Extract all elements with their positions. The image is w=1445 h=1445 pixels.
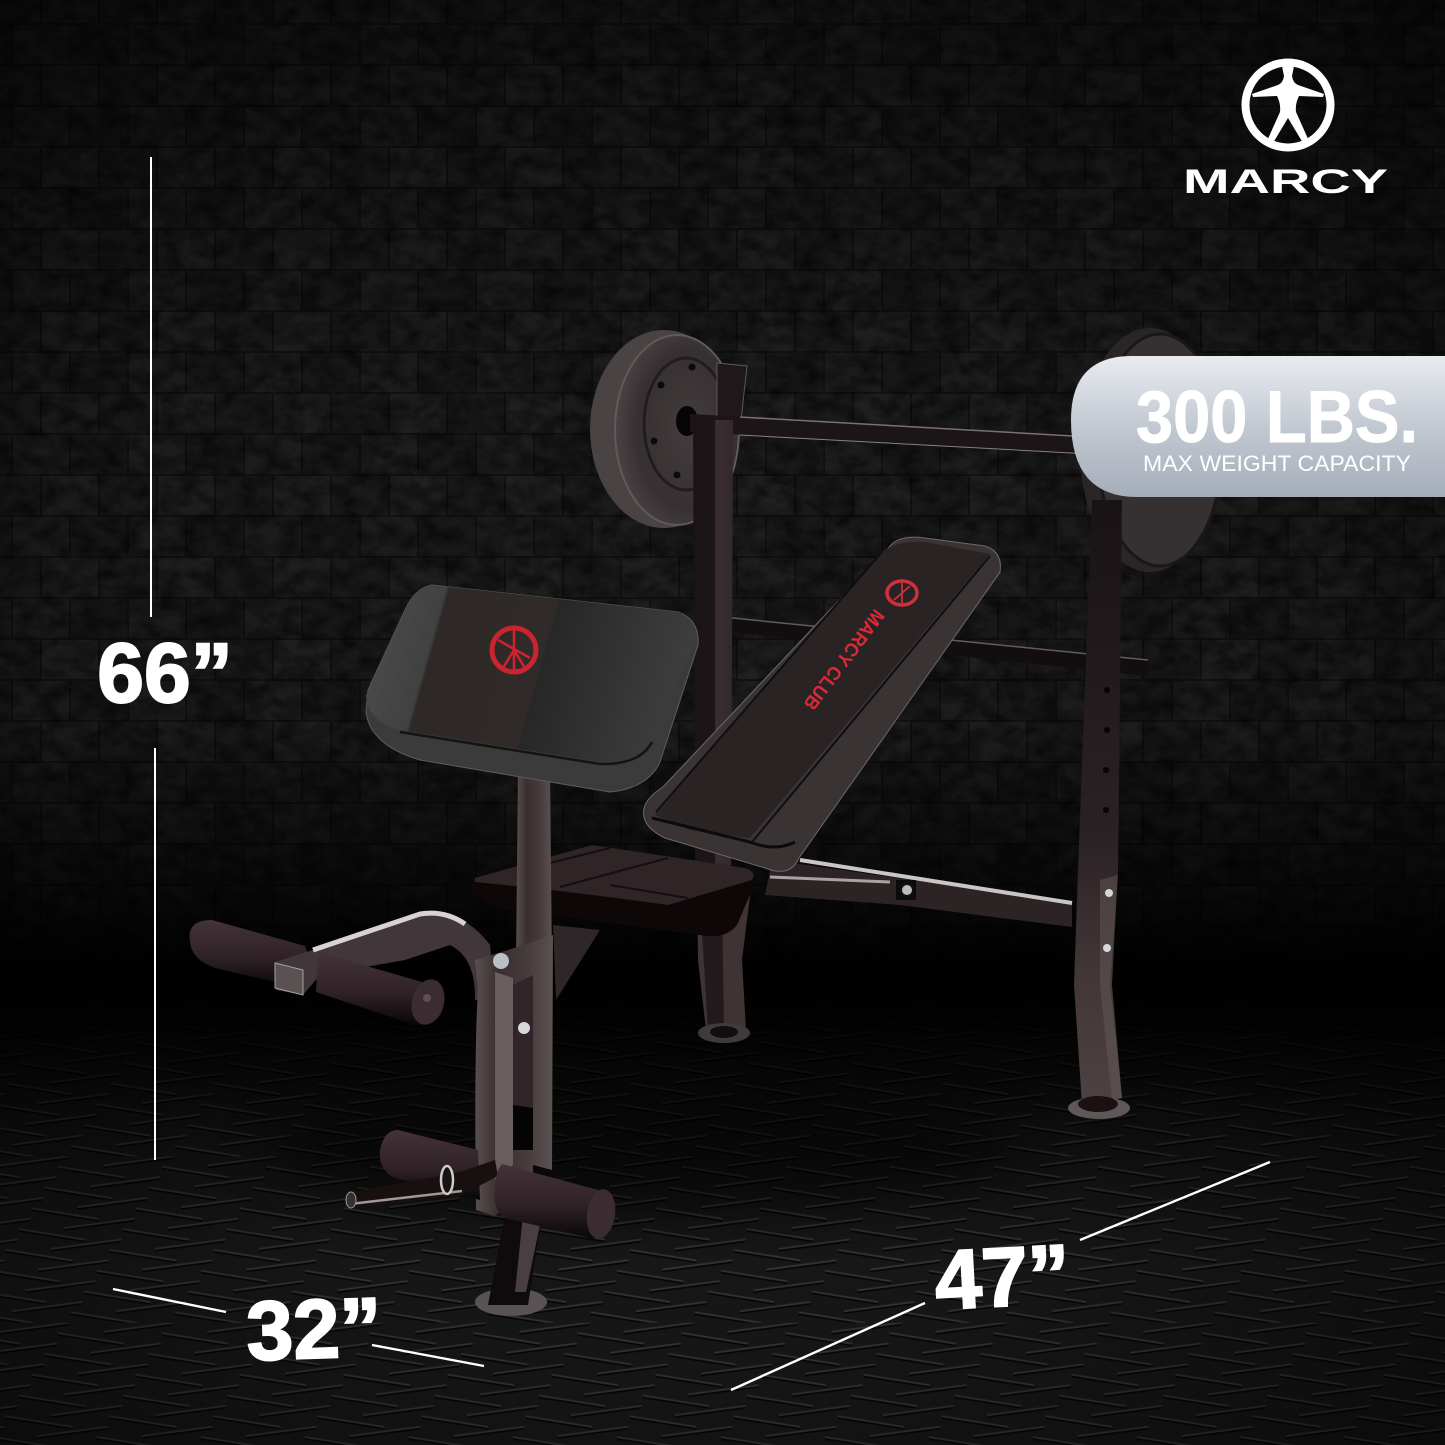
front support post (475, 925, 600, 1216)
floor shadow beneath bench (260, 1090, 1020, 1210)
dimension: depth 32 inches: 32” (245, 1280, 383, 1378)
weight bench (189, 328, 1222, 1316)
left upright (693, 420, 752, 1043)
icon: vitruvian man in circle (1246, 62, 1330, 148)
background: brick wall (0, 0, 1445, 1000)
callout: max weight capacity: 300 LBS. (1136, 377, 1418, 458)
preacher curl post (516, 770, 552, 965)
background: diamond plate floor (0, 985, 1445, 1445)
lower foot and base (475, 1215, 547, 1316)
dimension: depth 32 inches (113, 1280, 484, 1378)
barbell and rear cross bars (690, 414, 1148, 676)
leg developer arm and rollers (189, 912, 495, 1028)
incline back pad (644, 537, 1000, 871)
incline back pad: MARCY CLUB (799, 605, 888, 713)
bench brace (765, 860, 1072, 927)
wordmark: MARCY (1183, 163, 1389, 201)
left weight plate (590, 330, 747, 528)
dimension: height 66 inches (97, 157, 233, 1160)
preacher curl pad (366, 585, 698, 792)
dimension: width 47 inches (731, 1162, 1270, 1390)
callout: max weight capacity: MAX WEIGHT CAPACITY (1143, 451, 1411, 476)
logo: Marcy (1183, 62, 1389, 201)
right weight plate (1080, 328, 1222, 572)
dimension: height 66 inches: 66” (97, 626, 233, 720)
callout: max weight capacity (1071, 356, 1445, 497)
right upright (1068, 500, 1130, 1119)
lower leg rollers and weight sleeve (346, 1130, 618, 1241)
seat pad (470, 845, 754, 936)
dimension: width 47 inches: 47” (932, 1227, 1073, 1328)
